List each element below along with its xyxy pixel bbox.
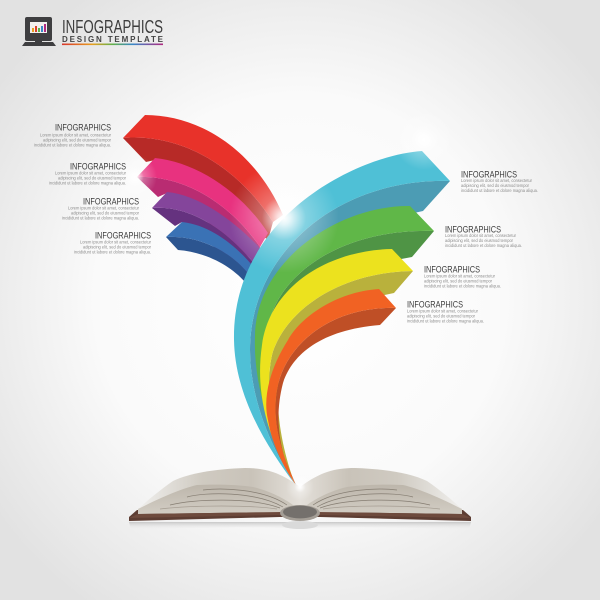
left label 4	[74, 230, 151, 254]
right label 4	[407, 300, 484, 324]
right page block	[307, 485, 462, 514]
logo title: INFOGRAPHICS	[62, 17, 163, 37]
right label 3: INFOGRAPHICS	[424, 264, 480, 276]
right label 3	[424, 264, 501, 288]
left label 1	[34, 122, 111, 148]
ribbon: orange	[266, 289, 396, 485]
right label 1: adipiscing elit, sed do eiusmod tempor	[461, 183, 529, 188]
left label 4: incididunt ut labore et dolore magna aliqua.	[74, 250, 151, 254]
book cover	[129, 510, 471, 521]
ribbon: green	[255, 206, 434, 483]
spine reflection	[282, 521, 318, 529]
ribbon: red	[123, 115, 283, 240]
left ribbons	[123, 115, 283, 282]
left label 3: incididunt ut labore et dolore magna aliqua.	[62, 216, 139, 220]
icon: monitor	[22, 17, 56, 46]
right label 1	[461, 170, 538, 193]
left label 2	[49, 162, 126, 186]
left label 1: Lorem ipsum dolor sit amet, consectetur	[40, 132, 111, 138]
left label 4: adipiscing elit, sed do eiusmod tempor	[83, 244, 151, 250]
left label 1: adipiscing elit, sed do eiusmod tempor	[43, 138, 111, 142]
right label 3: Lorem ipsum dolor sit amet, consectetur	[424, 274, 495, 278]
ribbon: yellow	[260, 249, 413, 484]
open book	[129, 468, 471, 530]
ribbon: teal	[234, 151, 450, 487]
right ribbons	[234, 151, 450, 487]
left label 2: INFOGRAPHICS	[70, 162, 126, 172]
right label 2: adipiscing elit, sed do eiusmod tempor	[445, 238, 513, 243]
light flares	[113, 110, 454, 273]
left label 1: INFOGRAPHICS	[55, 122, 111, 134]
left label 4: Lorem ipsum dolor sit amet, consectetur	[80, 240, 151, 244]
right upper page	[300, 468, 462, 513]
left page block	[138, 485, 293, 514]
right label 4: INFOGRAPHICS	[407, 300, 463, 310]
left label 3: adipiscing elit, sed do eiusmod tempor	[71, 210, 139, 216]
ribbon: purple	[152, 192, 260, 275]
left upper page	[138, 468, 300, 513]
left label 1: incididunt ut labore et dolore magna aliqua.	[34, 142, 111, 148]
page lines	[160, 489, 440, 509]
ribbon: pink	[137, 158, 268, 262]
right label 3: incididunt ut labore et dolore magna aliqua.	[424, 284, 501, 288]
rainbow underline	[62, 44, 163, 45]
cover edges	[129, 512, 471, 518]
logo subtitle: DESIGN TEMPLATE	[62, 35, 164, 44]
right label 4: incididunt ut labore et dolore magna aliqua.	[407, 318, 484, 324]
ribbon: blue	[166, 222, 252, 282]
right label 2: Lorem ipsum dolor sit amet, consectetur	[445, 233, 516, 238]
left label 3: INFOGRAPHICS	[83, 196, 139, 208]
left label 2: adipiscing elit, sed do eiusmod tempor	[58, 176, 126, 180]
right label 4: Lorem ipsum dolor sit amet, consectetur	[407, 308, 478, 314]
spine	[280, 505, 320, 521]
right label 1: incididunt ut labore et dolore magna aliqua.	[461, 188, 538, 193]
left label 3: Lorem ipsum dolor sit amet, consectetur	[68, 206, 139, 210]
right label 1: INFOGRAPHICS	[461, 170, 517, 180]
right label 2	[445, 224, 522, 248]
left label 2: incididunt ut labore et dolore magna aliqua.	[49, 180, 126, 186]
right label 1: Lorem ipsum dolor sit amet, consectetur	[461, 178, 532, 183]
right label 3: adipiscing elit, sed do eiusmod tempor	[424, 278, 492, 284]
left label 4: INFOGRAPHICS	[95, 230, 151, 242]
right label 2: incididunt ut labore et dolore magna aliqua.	[445, 243, 522, 248]
logo header	[22, 17, 164, 46]
book reflection	[129, 522, 471, 530]
left label 2: Lorem ipsum dolor sit amet, consectetur	[55, 170, 126, 176]
right label 2: INFOGRAPHICS	[445, 224, 501, 236]
book glow	[286, 473, 314, 501]
right label 4: adipiscing elit, sed do eiusmod tempor	[407, 314, 475, 318]
left label 3	[62, 196, 139, 220]
